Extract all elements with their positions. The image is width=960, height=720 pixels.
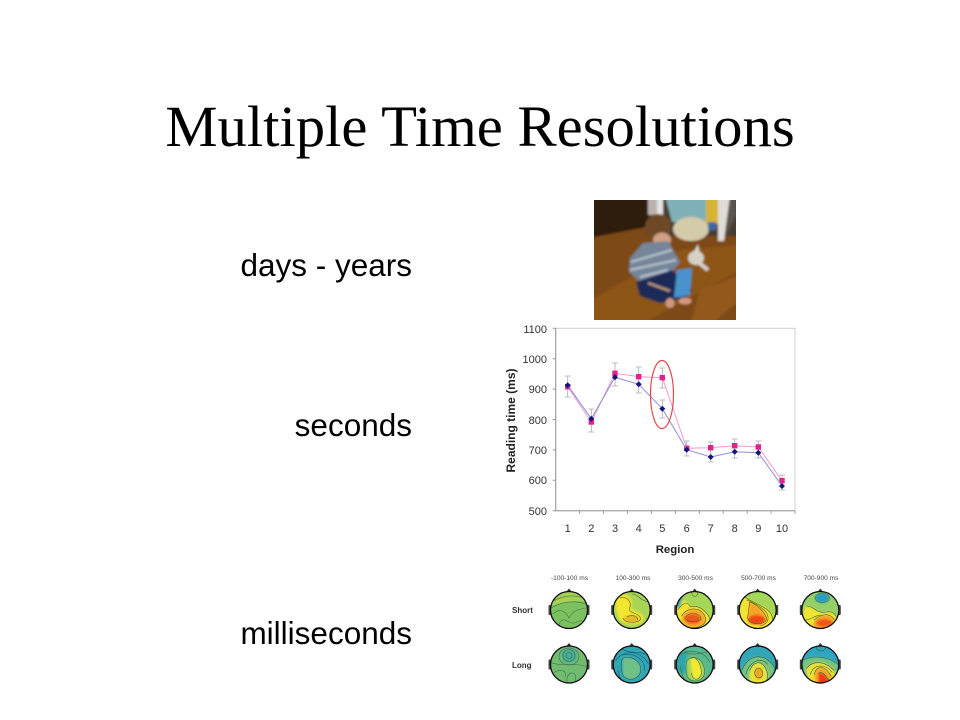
- chart: reading time by region: [504, 324, 795, 556]
- head: long 1: [548, 643, 590, 684]
- x axis labels: [565, 523, 788, 535]
- time labels: 100-300 ms: [616, 575, 651, 582]
- y axis labels: 600: [529, 475, 547, 487]
- head: long 3: [674, 643, 715, 684]
- head: long 5: [800, 643, 841, 684]
- time labels: 500-700 ms: [741, 575, 777, 582]
- y axis labels: 800: [529, 415, 547, 427]
- x axis labels: 9: [755, 523, 761, 535]
- y axis labels: 900: [529, 384, 547, 396]
- x axis labels: 10: [776, 523, 788, 535]
- time labels: -100-100 ms: [551, 575, 589, 582]
- head: long 2: [611, 643, 652, 684]
- head: long 4: [737, 643, 778, 684]
- time labels: 300-500 ms: [678, 575, 714, 582]
- callout ellipse: [650, 360, 674, 428]
- label: milliseconds: milliseconds: [240, 615, 412, 651]
- y axis labels: 1100: [523, 324, 547, 336]
- chart: scalp topography maps: [512, 575, 841, 684]
- head: short 2: [611, 588, 652, 630]
- photo: child reading a book: [594, 200, 736, 320]
- y axis labels: [523, 324, 547, 518]
- head: short 1: [548, 588, 590, 630]
- title: Multiple Time Resolutions: [165, 94, 795, 159]
- label: seconds: seconds: [295, 407, 412, 443]
- time labels: 700-900 ms: [804, 575, 839, 582]
- head: short 3: [674, 588, 715, 630]
- x axis labels: 3: [612, 523, 618, 535]
- x axis labels: 7: [708, 523, 714, 535]
- series: blue: [565, 374, 785, 489]
- row label: Long: Long: [512, 661, 532, 670]
- head: short 4: [737, 588, 778, 630]
- x axis labels: 2: [588, 523, 594, 535]
- error bars: [565, 363, 785, 490]
- time labels: [551, 575, 839, 582]
- x axis labels: 5: [659, 523, 665, 535]
- y axis labels: 700: [529, 445, 547, 457]
- x axis labels: 4: [636, 523, 642, 535]
- label: days - years: days - years: [240, 247, 412, 283]
- row label: Short: Short: [512, 606, 533, 615]
- series: pink: [565, 371, 785, 483]
- x axis labels: 1: [565, 523, 571, 535]
- y axis labels: 1000: [523, 354, 547, 366]
- x axis labels: 8: [732, 523, 738, 535]
- x axis labels: 6: [684, 523, 690, 535]
- y axis title: Reading time (ms): [504, 368, 518, 473]
- child: [645, 214, 671, 240]
- head: short 5: [800, 588, 841, 630]
- x axis title: Region: [656, 544, 694, 556]
- y axis labels: 500: [529, 506, 547, 518]
